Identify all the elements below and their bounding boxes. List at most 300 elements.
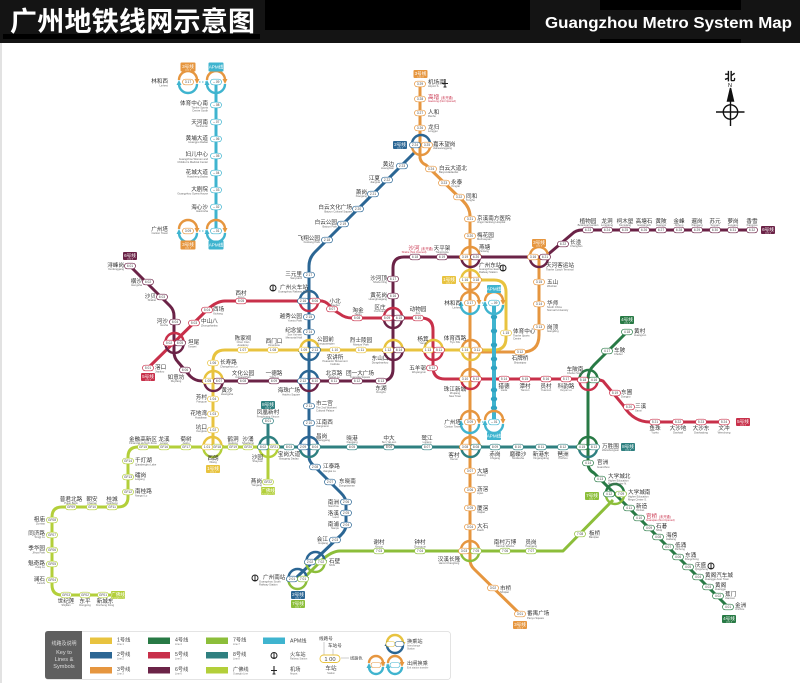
station pills: line 6: 6 27	[658, 228, 664, 232]
label: Guangzhou South railway station: 广州南站	[263, 573, 286, 581]
station pills: line 5: 5 10	[415, 316, 421, 320]
station pills: Guangfo line: GF16	[160, 445, 168, 449]
station pills: line 3: 3 14	[536, 302, 542, 306]
station labels: Guangfo line: Shachong	[242, 441, 255, 445]
station labels: line 2: Nanpu	[331, 526, 340, 530]
station labels: line 7 and line 8: Sun Yat-sen	[382, 440, 397, 444]
legend line keys: Line 2	[117, 658, 124, 660]
station labels: line 7 and line 8: 南村万博	[494, 538, 517, 546]
station pills: line 1: 1 05	[205, 379, 211, 383]
station pills: line 3: 3 17	[467, 301, 473, 305]
station labels: Guangfo line: 新城东	[97, 597, 114, 605]
station labels: line 2: Cultural Palace	[316, 408, 335, 412]
label: Guangzhou South railway station	[259, 573, 286, 586]
station pills: line 4: 4 16	[591, 378, 597, 382]
tag: line 6 east	[761, 226, 775, 234]
tag: line 5 east: Line 5	[740, 424, 747, 426]
legend line keys: 1号线	[117, 636, 130, 644]
station labels: line 1: Peasants' Movement	[322, 359, 348, 363]
station labels: line 3: 华师	[547, 299, 559, 307]
station pills: line 6: 6 25	[622, 228, 628, 232]
station pills: line 6: 6 03	[159, 295, 165, 299]
station labels: APM panel: 林和西	[151, 77, 168, 85]
station pills: line 5	[142, 298, 730, 425]
station labels: Guangfo line: Longxi	[160, 441, 168, 445]
station pills: line 6: 6 24	[604, 228, 610, 232]
station pills: line 7: 7 04	[417, 549, 423, 553]
station labels: line 7 and line 8: 钟村	[414, 538, 426, 546]
legend: railway station	[271, 650, 308, 660]
station labels: line 4: Huangcun	[634, 333, 647, 337]
compass: N	[728, 83, 732, 89]
station pills: line 8: 8 02	[260, 445, 266, 449]
line 3 branch route	[470, 257, 539, 352]
station pills: line 2: 2 24	[412, 143, 418, 147]
station pills: line 2: 2 05	[343, 511, 349, 515]
legend line keys: Line 5	[175, 658, 182, 660]
label: Guangzhou railway station	[278, 283, 312, 294]
station labels: line 6: 萝岗	[727, 217, 739, 225]
tag: APM centre top: APM线	[487, 286, 502, 292]
station labels: line 6: Huanghuagang	[369, 297, 387, 301]
station pills: line 1: 1 08	[270, 348, 276, 352]
station labels: line 6: 龙洞	[601, 217, 613, 225]
tag: line 7 south	[291, 600, 305, 608]
station labels: line 6: 文化公园	[232, 369, 255, 377]
station labels: line 7 and line 8: 沙园	[252, 454, 263, 461]
icon: Qingsheng railway station	[708, 563, 714, 569]
station labels: line 4: Guanzhou	[597, 465, 610, 469]
station pills: APM line	[210, 79, 500, 425]
station pills: line 6: 6 29	[694, 228, 700, 232]
station labels: Guangfo line: 季华园	[28, 544, 45, 552]
station labels: line 5: 淘金	[352, 306, 364, 314]
station pills: line 1: 1 14	[462, 348, 468, 352]
line 8 route	[268, 421, 594, 447]
station labels: line 6: Luogang	[728, 223, 739, 227]
station pills: line 5: 5 06	[312, 299, 318, 303]
station labels: line 2: Nanzhou	[328, 504, 339, 508]
station pills: line 6: 6 05	[177, 341, 183, 345]
station labels: line 3: 燕塘	[479, 243, 491, 251]
station pills: line 2: 2 15	[306, 315, 312, 319]
station labels: line 6: 团一大广场	[346, 369, 374, 377]
station pills: line 5: 5 17	[563, 377, 569, 381]
legend: airport	[271, 665, 300, 676]
station pills: line 6: 6 32	[749, 228, 755, 232]
station labels: line 7 and line 8: 赤岗	[489, 450, 501, 458]
station labels: line 1: Fangcun	[197, 400, 207, 404]
station labels: line 5: 猎德	[498, 382, 510, 390]
station labels: line 6: 黄花岗	[370, 291, 387, 299]
station pills: line 6: 6 16	[390, 294, 396, 298]
station labels: line 3: 大石	[477, 522, 489, 530]
station labels: Guangfo line: Financial Hi-Tech Zone	[129, 441, 157, 445]
station labels: line 6: 金峰	[673, 217, 685, 225]
legend line keys: 3号线	[117, 665, 130, 673]
tag: line 3 APM panel bottom	[180, 240, 196, 250]
station pills: line 4: 4 15	[579, 445, 585, 449]
tag: line 3 east: 3号线	[533, 239, 545, 246]
station pills: line 1: 1 12	[385, 348, 391, 352]
station labels: line 3: Renhe	[428, 114, 436, 118]
station labels: Guangfo line: Qiandenghu Lake	[135, 462, 157, 466]
ring: 汉溪长隆	[461, 541, 479, 561]
station labels: line 7 and line 8: Xiecun	[375, 544, 384, 548]
station labels: line 2: 会江	[317, 535, 328, 543]
ring: 万胜围	[579, 437, 597, 457]
icon: Guangzhou East railway station	[500, 265, 506, 271]
legend: station number schema: Station	[327, 672, 335, 675]
station pills: line 5: 5 05	[238, 299, 244, 303]
line 3 route	[420, 84, 520, 614]
station labels: line 3: 白云大道北	[439, 164, 467, 172]
station labels: line 5: 大沙东	[693, 424, 710, 432]
station pills: line 6: 6 18	[412, 255, 418, 259]
station pills: line 6: 6 31	[730, 228, 736, 232]
station labels: line 2: Gongyuanqian	[317, 342, 335, 346]
station labels: line 6: Tianpingjia	[436, 250, 449, 254]
station pills: line 6: 6 21	[542, 255, 548, 259]
station labels: line 3: 沥滘	[477, 485, 489, 493]
station pills: line 4: 4 14	[585, 461, 591, 465]
station labels: line 3: Lijiao	[477, 491, 484, 495]
station labels: line 7 and line 8: 磨碟沙	[510, 450, 527, 458]
station labels: line 2: Haizhu Square	[282, 392, 301, 396]
station pills: line 3: 3 10	[462, 377, 468, 381]
tag: line 4 south: Line 4	[726, 621, 733, 623]
station labels: line 5: Wenchong	[718, 430, 731, 434]
legend: station number schema: 线路色	[350, 654, 363, 662]
station labels: APM panel: 黄埔大道	[186, 134, 208, 142]
station labels: line 5	[155, 289, 731, 434]
station labels: line 3: 京溪南方医院	[477, 214, 511, 222]
station labels: line 7 and line 8: Yuangang	[525, 544, 538, 548]
station labels: line 2: Jiangxia	[370, 180, 380, 184]
station labels: line 3: Shiqiao	[500, 590, 509, 594]
Guangfo line route	[52, 447, 274, 595]
ring: 石壁	[306, 552, 324, 572]
station labels: line 1: 西朗	[207, 454, 219, 462]
station pills: line 3: 3 27	[417, 111, 423, 115]
station labels: line 4: 万胜围	[602, 442, 619, 450]
station labels: line 4: 大学城南	[628, 488, 651, 496]
station labels: line 1: Xilang	[209, 460, 217, 464]
station labels: line 6: Tuanyida Square	[350, 375, 371, 379]
station pills: line 7: 7 02	[318, 560, 324, 564]
station pills: line 2: 2 16	[300, 299, 306, 303]
station labels: line 2: Huangbian	[381, 166, 394, 170]
station labels: line 2: Dongxiaonan	[339, 484, 355, 488]
station labels: Guangfo line: 朝安	[86, 495, 98, 503]
tag: line 7 east: Line 7	[589, 498, 596, 500]
station labels: Guangfo line: Tongji Lu	[34, 535, 45, 539]
station labels: line 3: Hanxi Changlong	[439, 561, 460, 565]
station pills: line 5: 5 22	[675, 420, 681, 424]
station labels: line 4: Higher Education	[628, 494, 649, 498]
station pills: line 1: 1 07	[240, 348, 246, 352]
station labels: line 5: Dashadong	[694, 430, 708, 434]
tag: line 3 north: Line 3	[418, 76, 424, 78]
legend: station number schema	[319, 635, 363, 675]
station labels: line 1: 芳村	[196, 393, 207, 401]
station pills: line 8: 8 05	[349, 445, 355, 449]
station pills: line 3: 3 24	[428, 167, 434, 171]
station labels: line 3: Gaozeng (Not Opened)	[428, 99, 456, 103]
ring: 燕塘	[462, 247, 480, 267]
station labels: Guangfo line: 千灯湖	[135, 456, 152, 464]
station pills: line 3: 3 13	[536, 325, 542, 329]
station labels: line 2: 白云公园	[315, 218, 337, 226]
station labels: Guangfo line: Yangang	[251, 483, 263, 487]
legend: interchange station: Station	[407, 648, 415, 650]
station labels: line 2: Jiangnanxi	[316, 424, 329, 428]
station labels: line 5: Yuzhu	[651, 430, 659, 434]
station labels: line 5: Wuyangcun	[412, 370, 426, 374]
station labels: line 6: 如意坊	[168, 373, 185, 381]
station pills: line 4: 4 10	[636, 516, 642, 520]
station labels: line 3: Tonghe	[466, 198, 475, 202]
station labels: line 5: 西场	[213, 305, 225, 313]
station labels: line 7 and line 8: 晓港	[346, 434, 358, 442]
station labels: line 3: Jiahewanggang	[433, 146, 452, 150]
station labels: line 1: Centre	[513, 336, 522, 340]
station labels: line 4: 黄村	[634, 327, 646, 335]
station labels: Guangfo line: Nangui Lu	[135, 494, 148, 498]
legend line keys: Line 4	[175, 643, 182, 646]
label: Guangzhou railway station: Guangzhou Railway Station	[278, 290, 312, 294]
ring: 西朗	[204, 437, 222, 457]
legend line keys: Line 3	[117, 672, 124, 676]
station labels: line 2: 昌岗	[316, 433, 328, 440]
icon: airport	[442, 79, 448, 87]
station pills: line 5: 5 01	[145, 366, 151, 370]
station labels: line 5: Taojin	[354, 312, 362, 316]
tag: line 8 west: 8号线	[262, 401, 274, 408]
station labels: line 3: Tianhe Coach Terminal	[546, 268, 574, 272]
station pills: line 2: 2 21	[370, 192, 376, 196]
station labels: line 1: 体育中心	[513, 327, 536, 335]
station pills: line 6: 6 10	[312, 379, 318, 383]
station labels: line 6: 河沙	[157, 317, 168, 325]
line 5 route	[148, 301, 724, 422]
station labels: line 6: Gaotangshi	[637, 223, 651, 227]
station pills: line 4: 4 04	[695, 575, 701, 579]
station pills: Guangfo line: GF04	[48, 578, 56, 582]
legend line keys	[90, 636, 306, 676]
station labels: line 2: 石壁	[329, 557, 341, 565]
station labels: Guangfo line: Guicheng	[106, 501, 118, 505]
station pills: line 4: 4 05	[685, 565, 691, 569]
station labels: line 1: 坑口	[196, 423, 207, 431]
station labels: line 6: Shahe Ding	[373, 280, 388, 284]
tag: line 1: Line 1	[446, 282, 453, 284]
tag: line 3 APM panel bottom: Line 3	[185, 248, 192, 250]
station pills: APM line: ↔05	[213, 154, 220, 158]
legend: railway station: Railway Station	[290, 658, 308, 660]
ring: 体育西路	[462, 340, 480, 360]
station labels: line 7 and line 8: 中大	[383, 434, 395, 442]
station labels: APM panel: Tianhe Sports	[191, 106, 209, 110]
station pills: APM line: ↔01	[213, 229, 220, 233]
station labels: line 4: 低涌	[675, 541, 687, 549]
station pills: Guangfo line: GF01	[99, 593, 107, 597]
station labels: line 4: 官洲	[597, 458, 609, 466]
legend: interchange station: Interchange	[407, 644, 421, 648]
station labels: line 4: Jiaomen	[725, 596, 736, 600]
station labels: Guangfo line: Dongping	[79, 603, 91, 607]
station pills: Guangfo line: GF21	[270, 445, 278, 449]
station labels: line 3: Dashi	[477, 528, 484, 532]
station pills: line 3: 3 03	[461, 549, 467, 553]
station labels: line 2: 黄边	[383, 160, 394, 168]
station pills: line 1: 1 02	[210, 428, 216, 432]
station pills: line 4: 4 07	[665, 545, 671, 549]
station labels: line 6: 柯木塱	[617, 217, 634, 225]
station labels: line 1: 长寿路	[220, 358, 237, 366]
station labels: line 5: 车陂南	[567, 365, 584, 373]
station labels: line 6: 沙河顶	[370, 274, 387, 282]
station pills: line 1: 1 01	[204, 445, 210, 449]
station labels: APM panel: 体育中心南	[180, 99, 208, 107]
station pills: line 1: 1 09	[301, 348, 307, 352]
ring: 东山口	[384, 340, 402, 360]
station pills: line 5: 5 19	[612, 391, 618, 395]
station labels: line 3: 广州塔	[444, 418, 461, 426]
tag: APM panel bottom: APM线	[209, 242, 224, 248]
station labels: line 3: Airport S.	[428, 84, 439, 88]
station pills: Guangfo line: GF08	[48, 518, 56, 522]
tag: line 8 west	[261, 401, 275, 409]
station labels: line 2: 海珠广场	[278, 386, 300, 394]
station pills: APM line: ↔08	[213, 103, 220, 107]
tag: line 8 east: Line 8	[625, 449, 632, 451]
tag: line 2 south	[291, 591, 305, 599]
ring: 天河客运站	[530, 247, 548, 267]
legend line keys: Guangfo Line	[233, 672, 249, 676]
station labels: line 3: 珠江新城	[444, 385, 467, 393]
legend: station number schema: 线路号	[319, 635, 333, 642]
station labels: line 4: 黄阁	[715, 581, 727, 589]
station labels: line 2: 洛溪	[328, 509, 339, 517]
line 6 route	[130, 230, 752, 381]
station labels: line 2	[278, 160, 394, 567]
station labels: line 6: (未开通)	[421, 246, 433, 251]
station pills: line 7: 7 06	[502, 549, 508, 553]
station labels: line 6: 浔峰岗	[107, 261, 124, 269]
line 2 route	[297, 152, 415, 577]
tag: APM panel bottom	[208, 240, 224, 250]
station labels: line 1: Changshou Lu	[220, 364, 238, 368]
station pills: line 6: 6 11	[331, 379, 337, 383]
station pills: line 5: 5 20	[626, 405, 632, 409]
station labels: Guangfo line: 东平	[79, 597, 91, 605]
tag: Guangfo line west	[111, 591, 125, 599]
station labels: line 5: Zhongshanba	[201, 324, 218, 328]
station pills: line 4: 4 12	[606, 492, 612, 496]
tag: line 2 north: 2号线	[394, 141, 406, 148]
station pills: line 2: 2 20	[355, 207, 361, 211]
station pills: line 6: 6 08	[240, 379, 246, 383]
station pills: line 2: 2 04	[343, 523, 349, 527]
ring: 杨箕	[424, 340, 442, 360]
tag: line 2 north	[393, 141, 407, 149]
station labels: line 7 and line 8: 谢村	[373, 538, 385, 546]
station labels: line 2: 东晓南	[339, 477, 356, 485]
station labels: line 3: 嘉禾望岗	[433, 140, 456, 148]
station labels: line 5: 滘口	[155, 363, 166, 371]
station labels: line 4: 庆盛	[695, 561, 707, 569]
station pills: line 1: 1 13	[425, 348, 431, 352]
station pills: line 1: 1 06	[210, 361, 216, 365]
legend: station number schema: 车站	[325, 664, 337, 672]
station labels: line 4: 海傍	[666, 531, 678, 539]
legend: airport: 机场	[290, 665, 300, 673]
station labels: line 6: 天平架	[434, 245, 451, 252]
exit transfer: 林和西 north panel	[179, 71, 225, 93]
station labels: line 6: Hesha	[160, 323, 168, 327]
station pills: line 3: 3 04	[467, 525, 473, 529]
station labels: line 6: Huangpi	[656, 223, 666, 227]
station labels: line 7 and line 8: University	[383, 443, 396, 447]
station labels: Guangfo line: Pujun Beilu	[64, 501, 78, 505]
ring: 广州南站	[288, 569, 306, 589]
station labels: APM panel: Canton Tower	[151, 231, 168, 235]
station pills: line 8	[258, 418, 600, 450]
station pills: line 8: 8 12	[560, 445, 566, 449]
station labels: Guangfo line: 沙涌	[242, 435, 254, 443]
station labels: line 3: Kecun	[450, 457, 458, 461]
station labels: line 5: Keyun Lu	[560, 388, 572, 392]
station pills: line 3: 3 15	[536, 280, 542, 284]
station labels: line 7 and line 8: Fenghuang Xincun	[257, 414, 280, 418]
station pills: line 5: 5 09	[384, 316, 390, 320]
station pills: line 1: 1 15	[503, 331, 509, 335]
station labels: line 2: 纪念堂	[285, 326, 302, 334]
tag: line 5 east	[736, 418, 750, 426]
station pills: line 3: 3 29	[417, 82, 423, 86]
tag: line 1 south: 1号线	[207, 465, 219, 472]
ring: 珠江新城	[462, 369, 480, 389]
tag: line 7 east: 7号线	[586, 492, 598, 499]
station pills: line 5: 5 02	[166, 341, 172, 345]
station pills: line 7: 7 08	[577, 532, 583, 536]
station labels: APM panel: Tianhenan	[195, 124, 208, 128]
legend: railway station: 火车站	[290, 650, 306, 658]
station labels: line 1: 农讲所	[327, 353, 344, 361]
station pills: line 5: 5 16	[543, 377, 549, 381]
station labels: line 4: 蕉门	[725, 590, 737, 598]
station pills: line 7: 7 07	[528, 549, 534, 553]
station labels: line 2: Jiangtai Lu	[323, 469, 337, 473]
station pills: line 5: 5 14	[501, 377, 507, 381]
station pills: line 6: 6 30	[712, 228, 718, 232]
station labels: line 3: 大塘	[477, 467, 489, 475]
station labels: line 4: 新造	[636, 502, 648, 510]
station pills: line 3: 3 19	[462, 255, 468, 259]
station labels: line 3: 市桥	[500, 584, 512, 592]
station labels: line 3: 永泰	[451, 178, 463, 186]
station pills: line 3: 3 05	[467, 506, 473, 510]
station labels: line 5: 科韵路	[558, 382, 575, 390]
station labels: line 6: 一德路	[266, 369, 283, 377]
station pills: line 6: 6 28	[676, 228, 682, 232]
station labels: line 6: Hengsha	[131, 283, 142, 287]
legend line keys: 8号线	[233, 650, 246, 658]
station labels: line 7 and line 8: Zhongcun	[414, 544, 426, 548]
icon: Guangzhou South railway station	[252, 575, 258, 581]
station labels: line 5: Xiaobei	[331, 303, 340, 307]
